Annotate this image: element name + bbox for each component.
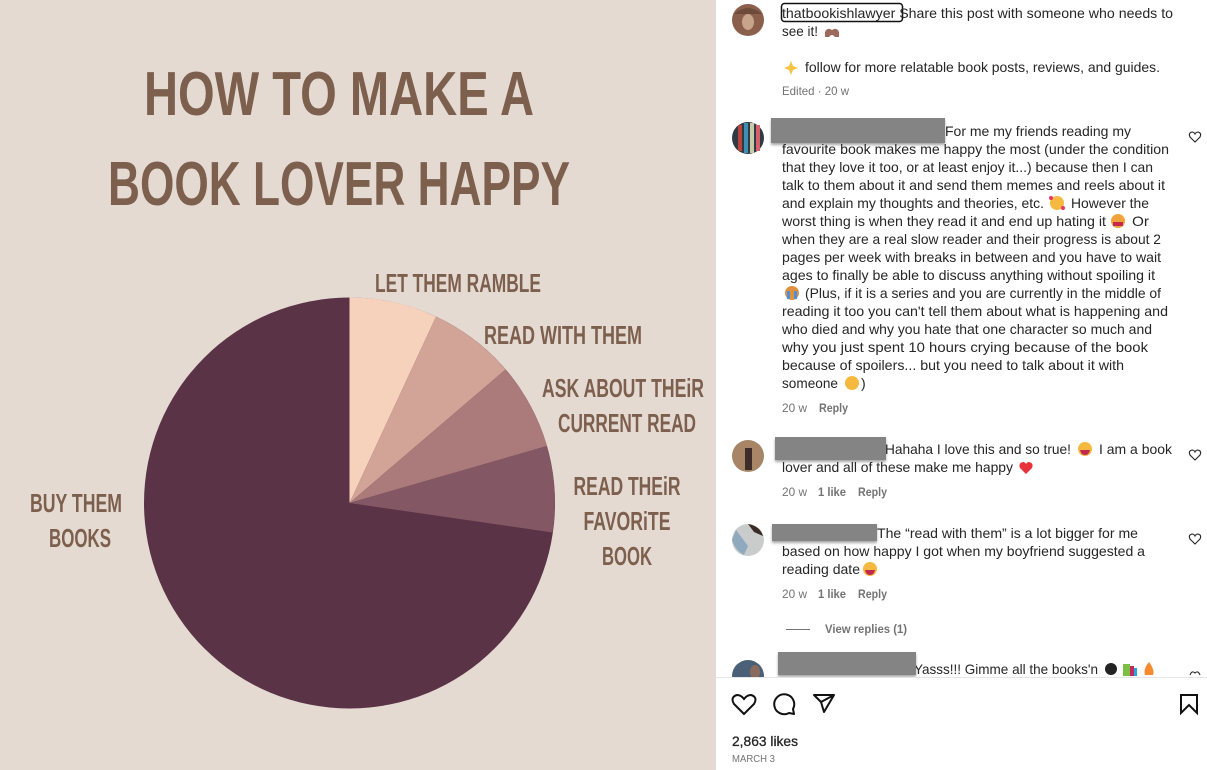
title: BOOK LOVER HAPPY — [108, 150, 570, 219]
icon: like heart (clipped) — [1190, 672, 1200, 675]
likes count: 2,863 likes — [732, 733, 798, 749]
comment 3: Reply — [858, 587, 887, 601]
comment 1: However the — [1071, 195, 1149, 211]
comment 1: who died and why you hate that one character so much and — [781, 321, 1152, 337]
caption: follow for more relatable book posts, reviews, and guides. — [805, 59, 1160, 75]
comment 1: when they are a real slow reader and their progress is about 2 — [781, 231, 1161, 247]
view replies: View replies (1) — [825, 622, 907, 636]
comment 1: why you just spent 10 hours crying because of the book — [781, 339, 1149, 355]
label: buy them books — [30, 488, 122, 553]
comment 3: 20 w — [782, 587, 807, 601]
comment 2: Reply — [858, 485, 887, 499]
icon: emoji — [1111, 214, 1125, 228]
comment 1 — [732, 118, 1201, 415]
icon: emoji — [845, 376, 859, 390]
title: HOW TO MAKE A — [144, 60, 534, 129]
caption: thatbookishlawyer Share this post with someone who needs to — [782, 5, 1173, 21]
icon: emoji — [863, 562, 877, 576]
comment 1: and explain my thoughts and theories, etc. — [782, 195, 1044, 211]
label: read their favorite book: FAVORiTE — [584, 506, 670, 536]
label: read with them: READ WITH THEM — [484, 320, 642, 350]
panel: action bar — [716, 677, 1207, 770]
comment 3: 1 like — [818, 587, 846, 601]
panel: caption and comments — [732, 4, 1201, 692]
redacted username — [771, 118, 945, 143]
comment 4 (clipped) — [732, 652, 1200, 692]
avatar: book spines — [732, 122, 764, 154]
comment 1: Or — [1132, 213, 1149, 229]
comment 1: 20 w — [782, 401, 807, 415]
comment 2: Hahaha I love this and so true! — [885, 441, 1071, 457]
comment 1: that they love it too, or at least enjoy it...) because then I can — [782, 159, 1153, 175]
icon: emoji row — [1105, 662, 1154, 676]
redacted username — [775, 437, 886, 460]
username focus box — [782, 4, 902, 22]
label: buy them books: BUY THEM — [30, 488, 122, 518]
icon: sparkles — [784, 61, 798, 75]
icon: heart hands — [825, 29, 839, 37]
icon: like heart — [1189, 132, 1201, 142]
label: read their favorite book: BOOK — [602, 541, 652, 571]
avatar — [732, 524, 764, 556]
comment 1: (Plus, if it is a series and you are currently in the middle of — [805, 285, 1161, 301]
icon: emoji — [1049, 196, 1065, 210]
comment 2: 20 w — [782, 485, 807, 499]
comment 3: The “read with them” is a lot bigger for me — [877, 525, 1138, 541]
comment 1: worst thing is when they read it and end up hating it — [781, 213, 1106, 229]
avatar — [732, 660, 764, 692]
pie chart — [144, 298, 555, 708]
comment 1: talk to them about it and send them memes and reels about it — [782, 177, 1165, 193]
label: let them ramble: LET THEM RAMBLE — [375, 268, 541, 298]
comment 4 (clipped): Yasss!!! Gimme all the books'n — [914, 661, 1098, 677]
label: ask about their current read: ASK ABOUT THEiR — [542, 373, 704, 403]
icon: like heart — [1189, 534, 1201, 544]
comment 1: ages to finally be able to discuss anything without spoiling it — [782, 267, 1155, 283]
icon: emoji — [785, 286, 799, 300]
label: read their favorite book: READ THEiR — [574, 471, 681, 501]
comment 2: 1 like — [818, 485, 846, 499]
icon: comment — [774, 694, 794, 714]
comment 1: ) — [861, 375, 866, 391]
comment 2 — [732, 437, 1201, 499]
date: MARCH 3 — [732, 754, 775, 765]
icon: share — [814, 695, 834, 712]
comment 1: For me my friends reading my — [945, 123, 1131, 139]
icon: like — [733, 695, 755, 714]
caption: Edited · 20 w — [782, 84, 849, 98]
label: read their favorite book — [574, 471, 681, 571]
label: ask about their current read — [542, 373, 704, 438]
comment 2: I am a book — [1099, 441, 1173, 457]
comment 1: because of spoilers... but you need to talk about it with — [782, 357, 1124, 373]
title — [108, 60, 570, 219]
icon: like heart — [1189, 450, 1201, 460]
redacted username — [778, 652, 916, 675]
comment 2: lover and all of these make me happy — [782, 459, 1013, 475]
comment 1: someone — [782, 375, 838, 391]
label: ask about their current read: CURRENT READ — [558, 408, 696, 438]
icon: emoji — [1078, 442, 1092, 456]
avatar — [732, 440, 764, 472]
comment 1: Reply — [819, 401, 848, 415]
comment 3: based on how happy I got when my boyfriend suggested a — [782, 543, 1145, 559]
redacted username — [772, 524, 877, 541]
caption — [732, 4, 1173, 98]
caption: see it! — [782, 23, 818, 39]
comment 1: pages per week with breaks in between and you have to wait — [782, 249, 1161, 265]
label: buy them books: BOOKS — [49, 523, 111, 553]
avatar: author — [732, 4, 764, 36]
icon: save — [1181, 695, 1197, 713]
comment 1: favourite book makes me happy the most (under the condition — [782, 141, 1169, 157]
comment 1: reading it too you can't tell them about what is happening and — [782, 303, 1168, 319]
panel: infographic image — [0, 0, 716, 770]
comment 3: reading date — [782, 561, 860, 577]
icon: red heart — [1019, 462, 1033, 474]
comment 3 — [732, 524, 1201, 601]
view replies — [786, 622, 907, 636]
